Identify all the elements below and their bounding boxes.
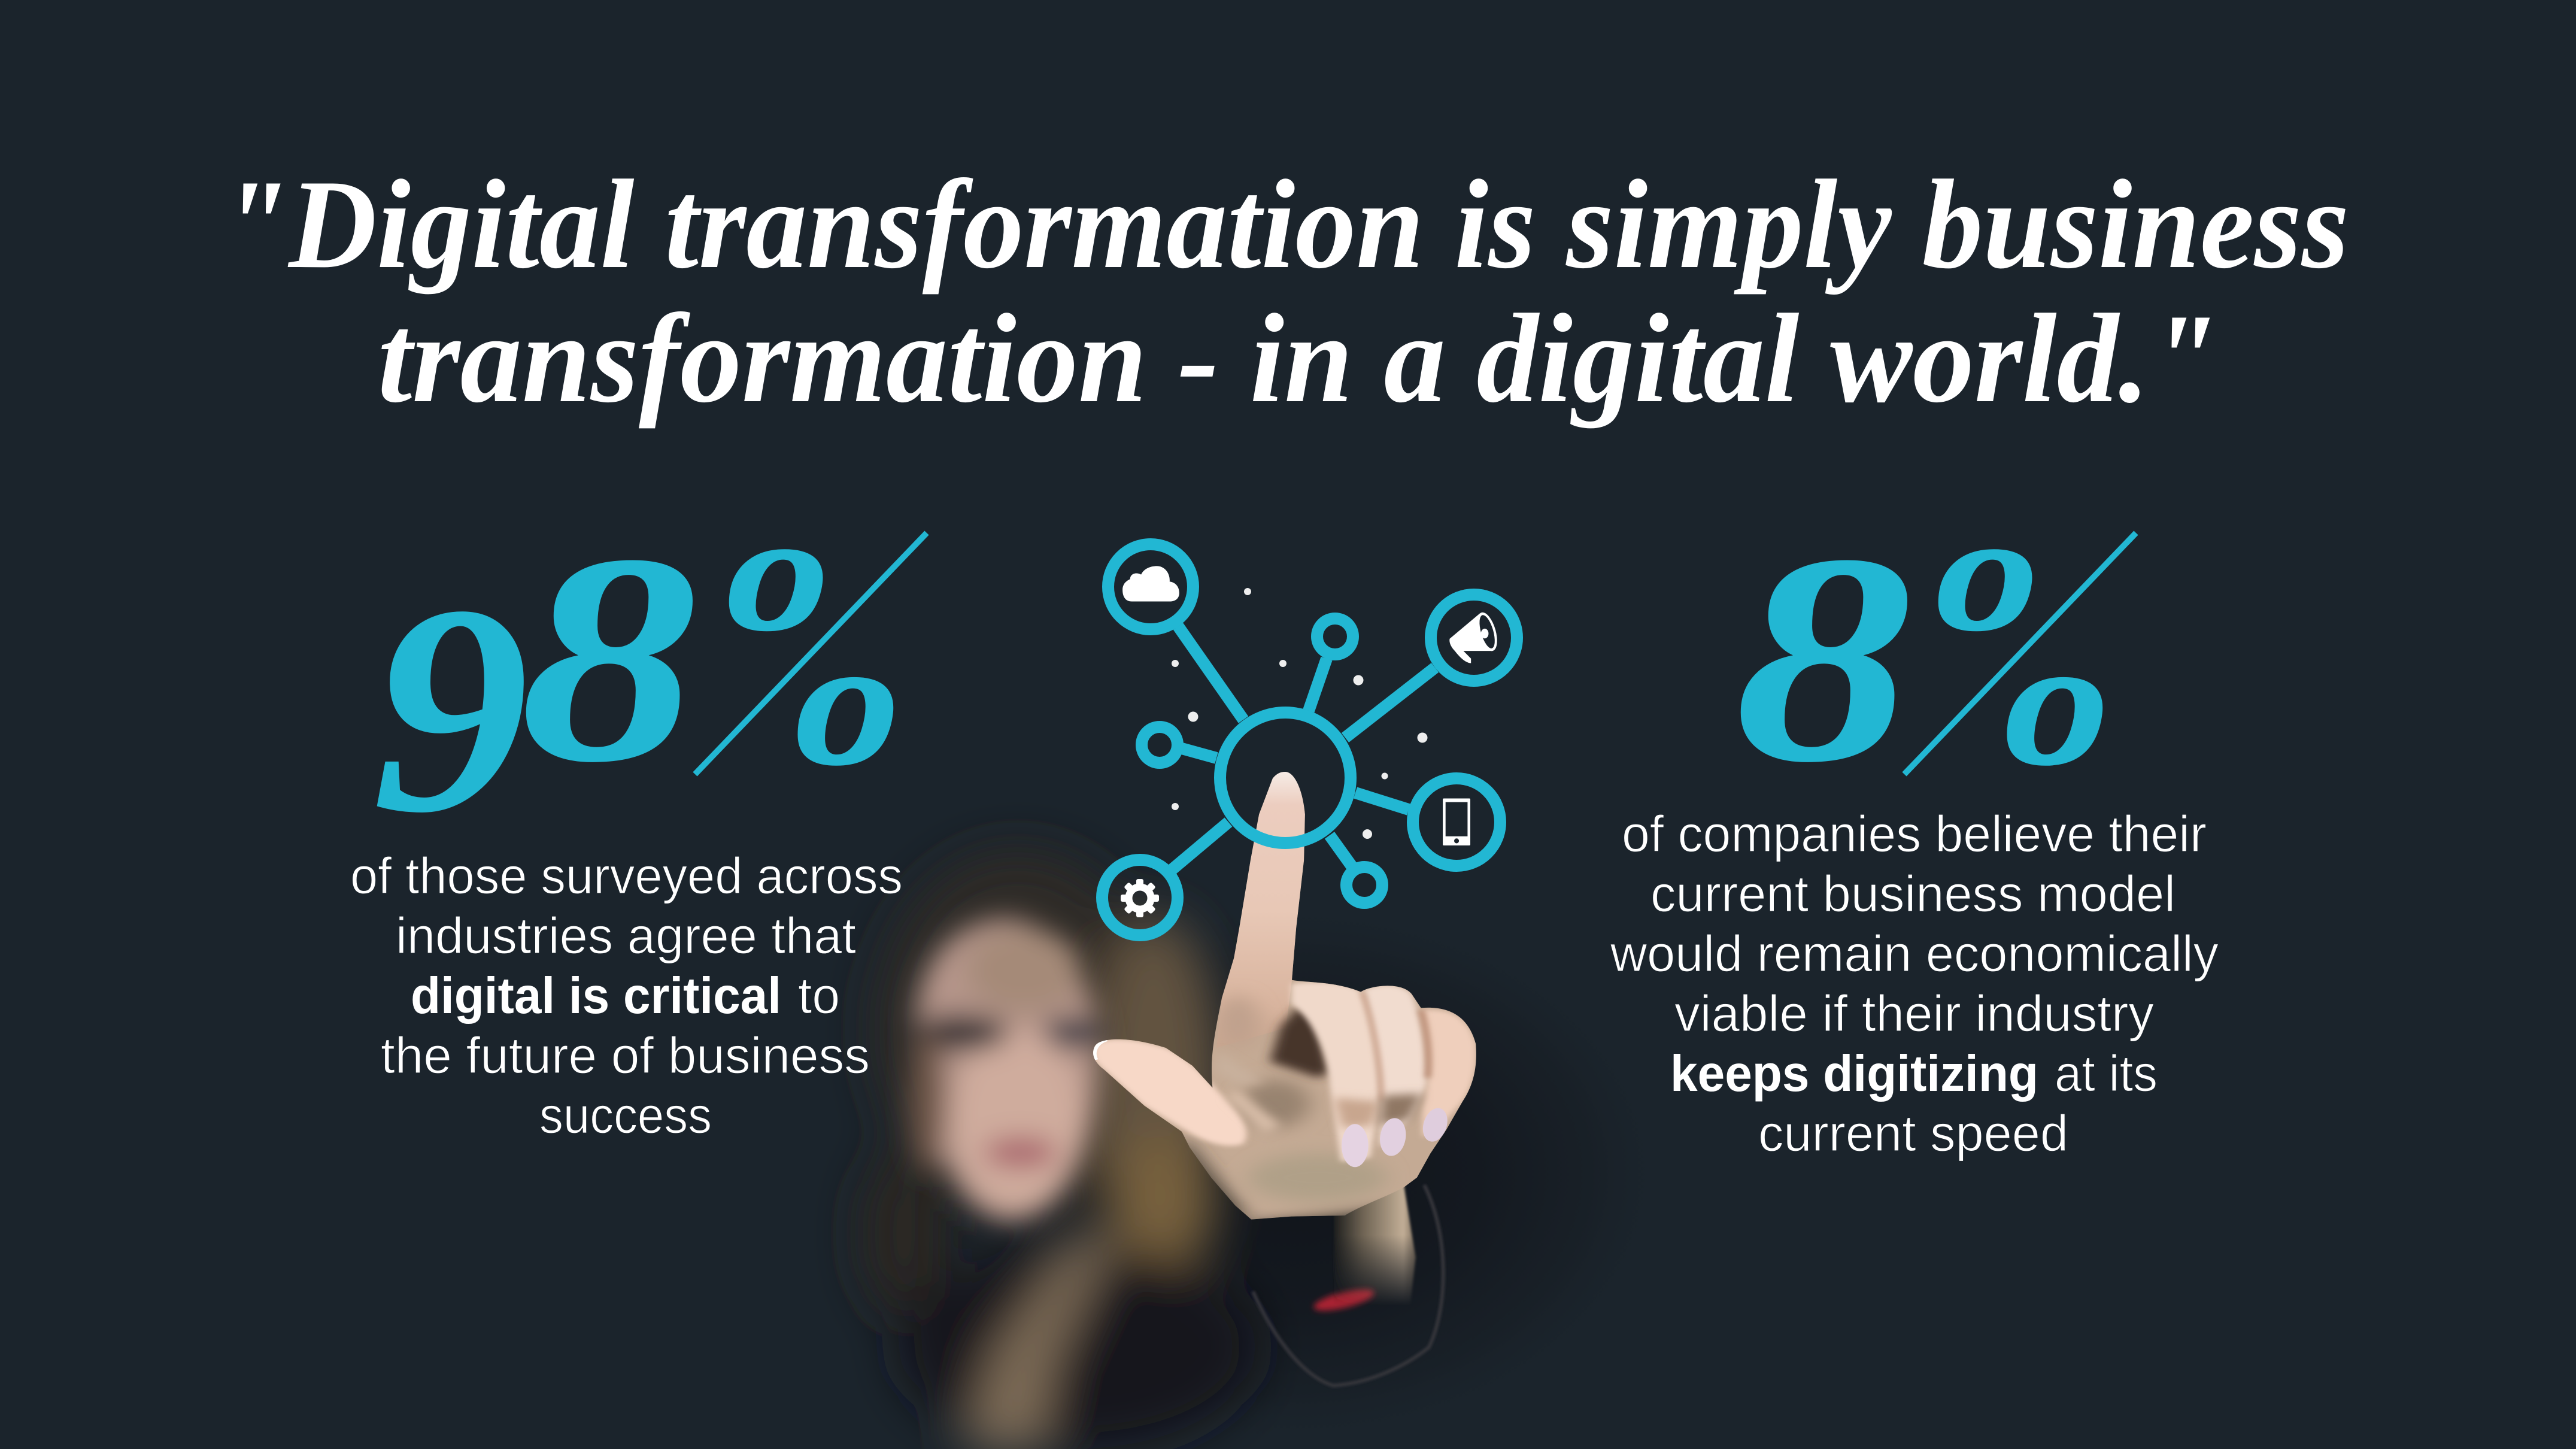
nails (1342, 1124, 1369, 1167)
satellite circles (1102, 544, 1517, 935)
left description: success (539, 1087, 712, 1144)
photo: woman and hand (866, 772, 1537, 1449)
big number 98%: 9 (372, 543, 529, 875)
right description: viable if their industry (1674, 986, 2154, 1042)
percent sign: rings and slash: % (1920, 498, 2159, 750)
little finger (1421, 1010, 1476, 1138)
title: transformation - in a digital world." (378, 288, 2218, 429)
big number 8% (1734, 493, 2159, 824)
finger gaps (1362, 992, 1428, 1102)
connector lines (1172, 626, 1435, 871)
wrist and sleeve (1253, 1184, 1443, 1386)
middle finger (1291, 982, 1379, 1162)
palm crease highlights (1227, 1088, 1281, 1133)
left description: digital is critical (411, 968, 781, 1024)
right description: would remain economically (1610, 926, 2219, 983)
thumb (1093, 1039, 1246, 1145)
stat: 8 percent (1610, 493, 2219, 1162)
palm shading (1183, 995, 1386, 1219)
dark surroundings of the person (904, 898, 1670, 1449)
left description: of those surveyed across (350, 848, 903, 905)
percent sign: rings and slash: % (1874, 544, 2117, 816)
percent sign: rings and slash: % (711, 498, 950, 750)
big number 98%: 8 (520, 493, 698, 824)
big number 8%: 8 (1734, 493, 1913, 824)
left description: industries agree that (396, 908, 856, 965)
hub circle (1220, 713, 1351, 843)
big number 98% (372, 493, 950, 875)
right description: current business model (1650, 866, 2176, 923)
woman blurred portrait (862, 850, 1257, 1449)
left description (350, 848, 903, 1144)
hand with raised index finger (1093, 772, 1476, 1219)
finger joints shadow (1334, 1098, 1379, 1127)
index finger (1216, 772, 1305, 1048)
icon: cloud (1122, 566, 1179, 602)
right description: current speed (1758, 1105, 2068, 1162)
left description: to (798, 968, 840, 1024)
right description (1610, 806, 2219, 1162)
stat: 98 percent (350, 493, 950, 1144)
shadow between index and middle finger (1270, 1006, 1330, 1078)
network diagram (1102, 544, 1517, 935)
percent sign: rings and slash: % (665, 544, 908, 816)
title (221, 154, 2349, 429)
left description: the future of business (381, 1027, 870, 1084)
thumb tip highlight (1095, 1040, 1107, 1060)
icon: smartphone (1443, 798, 1470, 845)
scattered dots (1172, 588, 1427, 839)
right description: keeps digitizing (1670, 1045, 2038, 1102)
icon: megaphone (1449, 611, 1501, 663)
icon: gear (1121, 879, 1159, 917)
right description: at its (2055, 1045, 2158, 1102)
right description: of companies believe their (1622, 806, 2207, 863)
title: "Digital transformation is simply business (221, 154, 2349, 295)
infographic canvas (243, 177, 2346, 1449)
ring finger (1364, 985, 1427, 1148)
